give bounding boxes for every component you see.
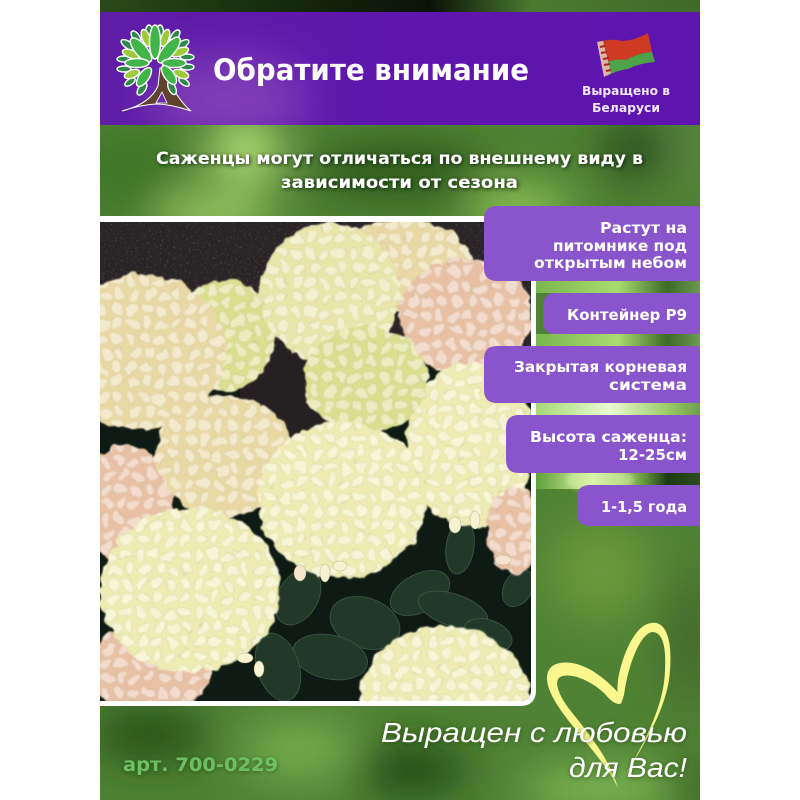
icon: yellow heart	[547, 623, 670, 788]
pill: seedling height: Высота саженца:	[530, 428, 687, 446]
subtitle: зависимости от сезона	[281, 173, 518, 193]
pill: grown outdoors	[484, 206, 700, 281]
slogan: для Вас!	[569, 752, 687, 783]
pill: age: 1-1,5 года	[601, 498, 687, 516]
pill: seedling height: 12-25см	[618, 446, 687, 464]
subtitle: Саженцы могут отличаться по внешнему виду в	[156, 149, 643, 169]
flag caption	[582, 84, 670, 115]
flag caption: Выращено в	[582, 84, 670, 98]
pill: age	[577, 485, 700, 526]
header band	[100, 12, 700, 125]
icon: Belarus flag	[597, 33, 655, 77]
pill: grown outdoors: питомнике под	[553, 237, 687, 255]
flag caption: Беларуси	[592, 101, 660, 115]
pill: container: Контейнер Р9	[567, 306, 687, 324]
slogan	[381, 717, 687, 783]
subtitle	[156, 149, 643, 193]
background: blurred green bokeh	[80, 0, 712, 800]
pill: grown outdoors: открытым небом	[534, 254, 687, 272]
photo: hydrangea blooms	[100, 216, 536, 706]
article number: арт. 700-0229	[123, 754, 278, 776]
logo: tree	[117, 25, 194, 111]
slogan: Выращен с любовью	[381, 717, 687, 748]
pill: closed root system	[484, 346, 700, 403]
pill: closed root system: Закрытая корневая	[514, 358, 687, 376]
pill: grown outdoors: Растут на	[600, 219, 687, 237]
pill: container	[543, 293, 700, 334]
title: Обратите внимание	[213, 53, 529, 87]
pill: seedling height	[506, 415, 700, 473]
pill: closed root system: система	[609, 376, 687, 394]
